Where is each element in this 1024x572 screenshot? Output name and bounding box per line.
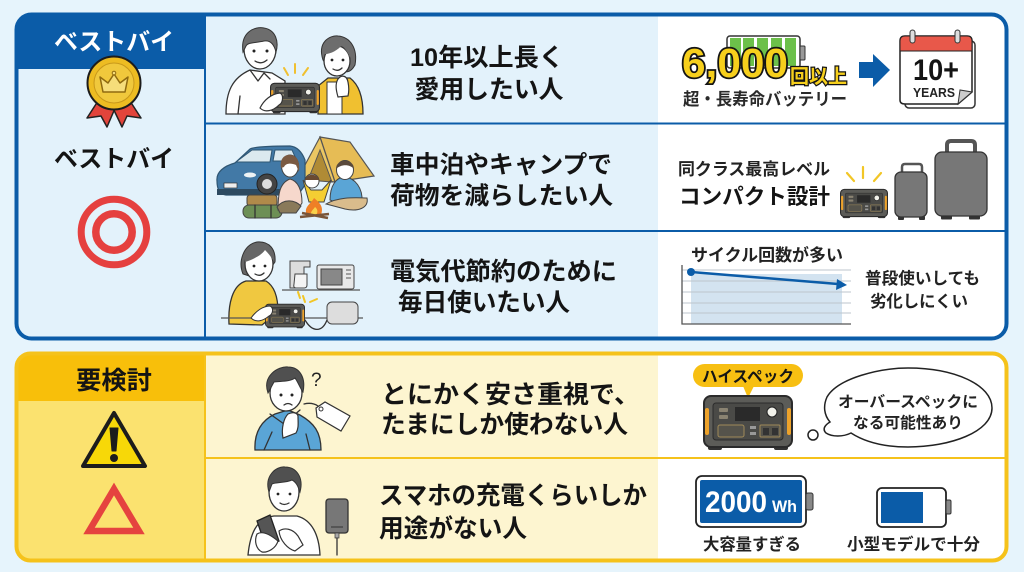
row 4 illustration: worried man with price tag: ? [311,370,322,391]
middle column background [206,355,658,559]
row 4 visual: high spec unit and speech bubble: なる可能性あり [853,413,963,432]
icon: calendar 10+ years: 10+ [913,54,959,87]
row 4 text: とにかく安さ重視で、 [381,381,640,409]
row 5 visual: small battery: 小型モデルで十分 [847,534,981,554]
left column header band [17,15,205,69]
row 5 visual: large capacity battery: 大容量すぎる [703,534,801,554]
rating label: ベストバイ [54,146,174,173]
row 3 text: 毎日使いたい人 [398,289,570,317]
row 1 illustration: couple with power station [226,28,363,114]
heading: best buy band: ベストバイ [54,29,174,56]
row 2 visual: compact design comparison: 同クラス最高レベル [678,159,830,179]
arrow: battery to ten years [859,54,890,87]
row 5 text: スマホの充電くらいしか [379,482,647,510]
icon: triangle mark [89,489,139,531]
row dividers [205,354,1006,559]
row 1 visual: 6000 cycle battery [682,36,847,109]
row 5 illustration: man with smartphone and small battery [248,467,348,555]
row 3 illustration: woman using daily appliances [221,242,363,329]
row 4 visual: high spec unit and speech bubble: オーバースペックに [838,393,978,411]
middle column background [206,15,658,337]
row 3 text [390,258,617,317]
row 3 text: 電気代節約のために [390,258,617,286]
icon: gold medal [87,56,141,127]
row 4 illustration: worried man with price tag [255,367,350,450]
heading: needs consideration: 要検討 [76,367,152,395]
row 3 visual: cycle chart [682,245,980,324]
row 2 illustration: car camping family [217,137,374,218]
row 1 visual: 6000 cycle battery: 6,000 [682,40,788,86]
row 4 visual: high spec unit and speech bubble: ハイスペック [702,368,794,386]
left column background [17,69,205,337]
left column background [17,401,205,559]
row 5 visual: large capacity battery: 2000 [705,486,767,519]
row dividers [205,15,1006,337]
row 4 text [381,381,640,439]
icon: calendar 10+ years: YEARS [913,86,955,100]
row 5 visual: large capacity battery: Wh [772,497,797,516]
row 4 text: たまにしか使わない人 [381,411,628,439]
row 3 visual: cycle chart: 普段使いしても [865,268,980,288]
row 2 text: 荷物を減らしたい人 [390,182,614,210]
panel outline [16,354,1006,560]
row 5 visual: small battery [847,488,981,554]
row 2 visual: compact design comparison [678,141,987,220]
row 3 visual: cycle chart: サイクル回数が多い [691,245,843,265]
panel: needs consideration [16,354,1006,560]
row 4 visual: high spec unit and speech bubble [693,364,992,450]
row 1 text: 愛用したい人 [414,76,564,104]
icon: warning triangle [83,413,145,466]
row 1 visual: 6000 cycle battery: 超・長寿命バッテリー [683,90,847,109]
row 5 visual: large capacity battery [696,476,813,554]
icon: double circle [81,199,147,265]
panel outline [16,14,1006,338]
row 1 visual: 6000 cycle battery: 回以上 [790,66,847,88]
row 3 visual: cycle chart: 劣化しにくい [870,292,968,311]
row 5 text: 用途がない人 [379,514,527,543]
left column header band [17,354,205,401]
row 5 text [379,482,647,543]
icon: calendar 10+ years [900,30,975,108]
panel: best buy [16,14,1006,338]
row 1 text [410,44,564,104]
row 1 text: 10年以上長く [410,44,564,72]
row 2 visual: compact design comparison: コンパクト設計 [679,185,830,209]
row 2 text [390,151,614,210]
row 2 text: 車中泊やキャンプで [390,151,612,179]
